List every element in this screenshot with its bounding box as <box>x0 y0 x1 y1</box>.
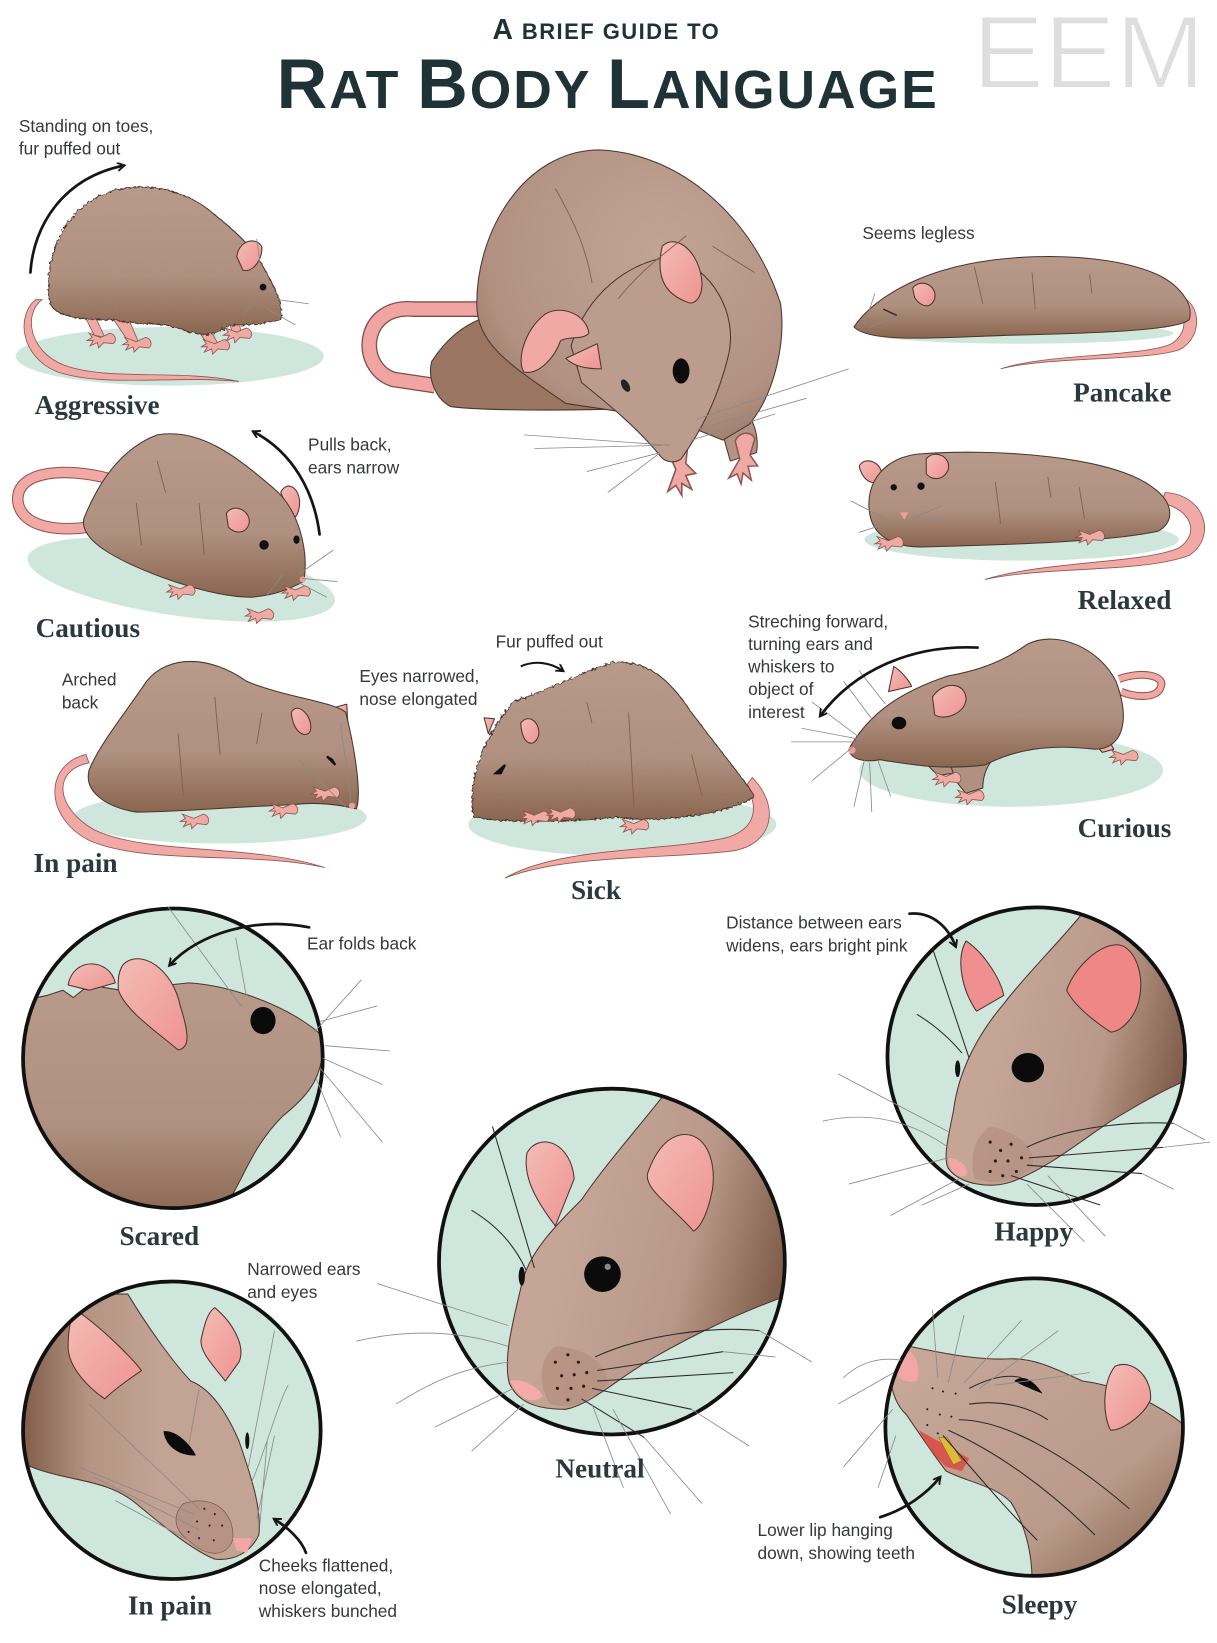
note: curious: turning ears and <box>748 634 873 654</box>
back ear <box>484 718 495 733</box>
fur marks <box>587 702 702 807</box>
front feet <box>728 431 763 486</box>
snout lines <box>299 723 351 807</box>
clipped head <box>946 915 1189 1185</box>
ear <box>913 283 935 306</box>
ear <box>521 719 539 743</box>
whiskers <box>943 1376 1130 1540</box>
label: pancake: Pancake <box>1073 377 1171 407</box>
narrow eye <box>1014 1378 1043 1394</box>
head circle: in pain <box>16 1281 321 1579</box>
label: aggressive: Aggressive <box>35 390 160 420</box>
ring <box>885 1278 1183 1576</box>
main title: RAT BODY LANGUAGE <box>277 44 937 123</box>
near ear <box>1067 945 1141 1032</box>
tail <box>1119 675 1161 696</box>
ear <box>933 685 966 717</box>
back ear <box>889 666 912 692</box>
legs and feet <box>84 312 241 344</box>
note: eyes narrowed: Eyes narrowed, <box>359 666 479 686</box>
head shape <box>946 915 1189 1185</box>
whisker dots <box>990 1142 1022 1176</box>
narrowed eye <box>327 757 335 765</box>
note: pancake: Seems legless <box>862 223 975 243</box>
ground shadow <box>468 793 776 856</box>
body <box>477 150 782 440</box>
far ear <box>526 1142 574 1226</box>
eye <box>584 1256 621 1292</box>
head circle: neutral <box>356 1089 812 1514</box>
back ear <box>281 486 300 519</box>
eye <box>250 1007 276 1034</box>
body <box>869 452 1170 547</box>
head shape <box>507 1097 791 1409</box>
body <box>48 187 281 334</box>
body <box>83 434 305 597</box>
rat: aggressive <box>16 187 324 386</box>
label: in pain: In pain <box>34 848 118 878</box>
head shape <box>891 1344 1189 1582</box>
rat: relaxed <box>851 452 1205 579</box>
note: cheeks: nose elongated, <box>259 1578 382 1598</box>
head shape <box>21 983 324 1221</box>
eye <box>163 1431 196 1456</box>
right front leg <box>719 393 757 461</box>
nose and feet <box>300 576 306 583</box>
note: aggressive: fur puffed out <box>19 139 120 159</box>
rat: sick <box>468 662 776 878</box>
arrow: cheeks <box>275 1519 306 1553</box>
fur marks <box>974 267 1092 309</box>
whiskers <box>472 1126 760 1438</box>
nose <box>948 1158 967 1177</box>
tail <box>985 492 1205 579</box>
eye <box>1012 1053 1044 1082</box>
label: sleepy: Sleepy <box>1002 1590 1078 1620</box>
note: aggressive: Standing on toes, <box>19 116 153 136</box>
head circle: happy <box>823 907 1210 1242</box>
ear <box>226 508 249 532</box>
ground shadow <box>859 733 1163 807</box>
whisker dots <box>555 1355 587 1400</box>
back leg <box>1090 728 1114 752</box>
feet <box>521 811 549 826</box>
tail <box>505 777 769 878</box>
inner whiskers <box>79 1388 199 1540</box>
note: eyes narrowed: nose elongated <box>359 689 477 709</box>
nose <box>894 1344 918 1382</box>
background disc <box>23 1281 321 1579</box>
ground shadow <box>16 327 324 386</box>
arrow: happy <box>909 914 956 946</box>
back ear <box>335 704 348 725</box>
nose <box>510 1380 543 1400</box>
label: cautious: Cautious <box>36 613 140 643</box>
arrow: aggressive <box>30 166 124 272</box>
label: relaxed: Relaxed <box>1078 585 1171 615</box>
arrow: curious <box>820 647 978 716</box>
head shape <box>16 1294 259 1559</box>
note: happy: widens, ears bright pink <box>725 935 908 955</box>
label: curious: Curious <box>1078 813 1171 843</box>
muzzle <box>541 1346 608 1406</box>
body <box>472 662 754 821</box>
note: curious: Streching forward, <box>748 612 888 632</box>
arrow: cautious <box>254 432 320 534</box>
ring <box>23 908 323 1208</box>
background disc <box>439 1089 785 1434</box>
closed eye <box>883 309 897 315</box>
front legs <box>938 754 995 793</box>
ground shadow <box>864 519 1179 561</box>
note: arched back: back <box>62 692 99 712</box>
far ear <box>201 1308 241 1381</box>
ear <box>660 242 702 303</box>
label: scared: Scared <box>119 1221 199 1251</box>
note: cheeks: whiskers bunched <box>258 1601 397 1621</box>
label: in pain (head): In pain <box>128 1591 212 1621</box>
note: cheeks: Cheeks flattened, <box>259 1556 393 1576</box>
note: happy: Distance between ears <box>726 912 902 932</box>
note: narrowed ears: and eyes <box>247 1282 318 1302</box>
label: happy: Happy <box>994 1217 1073 1247</box>
note: sleepy: down, showing teeth <box>758 1543 915 1563</box>
near ear <box>647 1135 713 1231</box>
side eye <box>519 1267 525 1286</box>
background disc <box>887 907 1185 1205</box>
clipped head <box>891 1344 1189 1582</box>
body <box>854 256 1190 338</box>
arrow: sleepy <box>880 1477 940 1517</box>
clipped head <box>507 1097 791 1409</box>
tail <box>24 300 239 381</box>
whiskers <box>917 948 1174 1205</box>
fur marks <box>136 461 204 555</box>
ears behind <box>859 461 882 483</box>
lower ear <box>566 344 601 369</box>
raised paw <box>521 310 589 372</box>
ground shadow <box>23 522 340 637</box>
label: sick: Sick <box>571 875 622 905</box>
rat: pancake <box>854 256 1197 369</box>
tail <box>55 754 325 868</box>
eyes <box>259 535 300 550</box>
note: curious: interest <box>748 702 805 722</box>
head circle: sleepy <box>838 1278 1189 1582</box>
whiskers <box>243 239 309 325</box>
ring <box>439 1089 785 1434</box>
rat: curious <box>791 639 1163 812</box>
title <box>277 13 937 123</box>
nose <box>233 1538 251 1553</box>
tooth <box>939 1438 962 1465</box>
fur marks <box>995 477 1084 524</box>
rat: in pain, full body <box>55 661 367 868</box>
eyes and nose <box>891 483 925 520</box>
ear <box>237 241 262 271</box>
subtitle: a brief guide to: A BRIEF GUIDE TO <box>492 13 719 45</box>
ring <box>23 1281 321 1579</box>
body <box>88 661 358 812</box>
note: cautious: ears narrow <box>308 458 400 478</box>
note: cautious: Pulls back, <box>308 435 392 455</box>
side eye <box>955 1060 960 1077</box>
note: scared: Ear folds back <box>307 933 417 953</box>
nose <box>848 747 856 754</box>
whiskers <box>851 501 943 532</box>
mouth <box>919 1430 969 1471</box>
clipped head <box>21 959 324 1221</box>
whiskers <box>524 369 849 492</box>
head circle: scared <box>21 906 390 1221</box>
head <box>571 257 731 462</box>
whisker dots <box>189 1509 222 1540</box>
whiskers <box>168 906 390 1142</box>
eyes <box>673 358 689 384</box>
background disc <box>23 908 323 1208</box>
ground shadow <box>73 791 367 844</box>
fur marks <box>555 189 754 299</box>
muzzle outline <box>176 1501 233 1553</box>
side eye <box>245 1432 249 1449</box>
nose and feet <box>349 803 355 809</box>
whiskers <box>248 1331 288 1525</box>
note: curious: object of <box>748 679 814 699</box>
rat: grooming <box>369 150 849 495</box>
body <box>849 639 1123 767</box>
whiskers <box>267 550 337 597</box>
note: arched back: Arched <box>62 669 117 689</box>
ear <box>1105 1364 1151 1430</box>
clipped head <box>16 1294 259 1559</box>
back ear <box>68 964 115 990</box>
note: curious: whiskers to <box>747 657 834 677</box>
background disc <box>885 1278 1183 1576</box>
ground shadow <box>870 323 1174 344</box>
folded ear <box>118 959 187 1050</box>
rat: cautious <box>18 434 340 637</box>
ear <box>926 454 949 479</box>
far ear <box>961 941 1004 1011</box>
ear <box>291 708 311 735</box>
narrowed eye <box>496 765 505 773</box>
tail <box>1001 293 1197 369</box>
tail <box>369 309 482 386</box>
tail <box>18 472 110 529</box>
label: neutral: Neutral <box>555 1453 645 1483</box>
note: narrowed ears: Narrowed ears <box>247 1259 361 1279</box>
feet <box>875 537 903 551</box>
note: sleepy: Lower lip hanging <box>758 1520 893 1540</box>
note: sick: Fur puffed out <box>496 632 603 652</box>
haunch <box>431 314 629 410</box>
arrow: scared <box>170 924 309 965</box>
whisker dots <box>927 1388 956 1433</box>
whiskers <box>864 293 901 327</box>
feet <box>933 772 961 787</box>
ring <box>887 907 1185 1205</box>
fur marks <box>178 697 262 796</box>
near ear <box>68 1310 141 1399</box>
eye <box>260 284 266 290</box>
arrow: sick <box>521 663 563 671</box>
eye <box>892 717 906 729</box>
whiskers <box>791 671 891 812</box>
muzzle <box>972 1126 1033 1182</box>
